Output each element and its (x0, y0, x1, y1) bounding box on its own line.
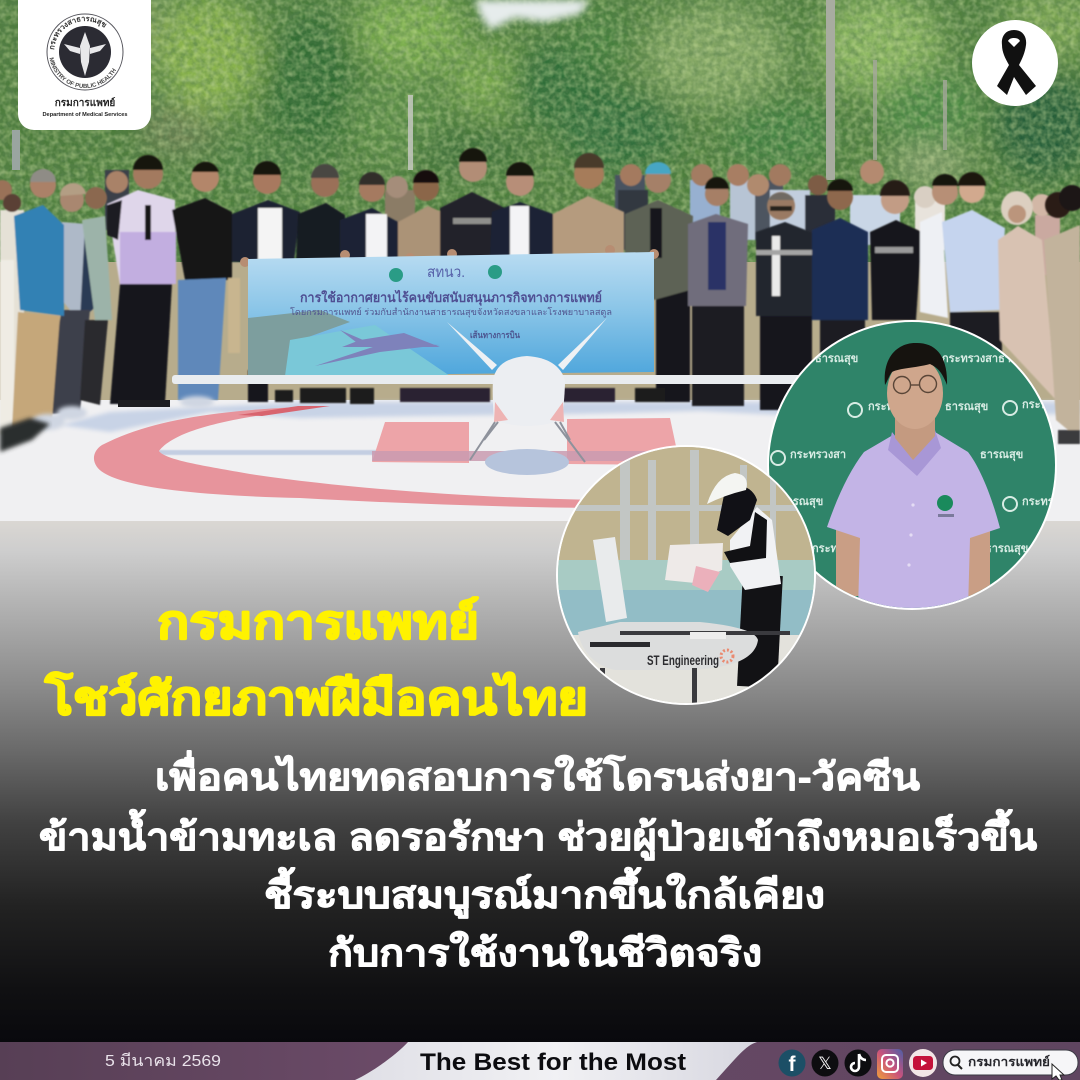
footer: slogan panel: The Best for the Most (420, 1049, 686, 1076)
jacket men (232, 200, 300, 262)
banner: aircraft illustration (315, 330, 440, 366)
tan uniform (396, 206, 442, 256)
icon: YouTube (909, 1049, 937, 1077)
dark vest man (756, 222, 816, 316)
team members standing in a row (0, 148, 1080, 452)
icon: X: 𝕏 (818, 1054, 832, 1073)
dry grass behind team (0, 262, 1080, 412)
helipad ground (0, 400, 1080, 522)
footer bar (0, 1042, 1080, 1080)
olive jacket (625, 200, 693, 300)
staff person in white vest (665, 473, 783, 688)
legs behind banner (656, 290, 690, 402)
search pill: กรมการแพทย์ (968, 1054, 1050, 1069)
banner: text: การใช้อากาศยานไร้คนขับสนับสนุนภารกิจทางการแพทย์ (300, 289, 602, 306)
black shirt reflective (440, 192, 505, 260)
icon: black mourning ribbon badge (972, 20, 1058, 106)
polo + jeans (172, 198, 232, 280)
far left, white uniform (0, 210, 24, 435)
grey jacket (688, 214, 748, 306)
icon: ministry seal: MINISTRY OF PUBLIC HEALTH (50, 57, 116, 88)
search pill (943, 1050, 1078, 1080)
backdrop logos: กระทรวงสา (790, 449, 846, 461)
body text: white summary (39, 750, 1037, 975)
icon: facebook (778, 1050, 806, 1076)
headline: yellow title: กรมการแพทย์ (157, 596, 479, 648)
icon: ministry seal: กระทรวงสาธารณสุข (50, 16, 106, 50)
inset photo: staff loading drone (556, 445, 818, 705)
gradient fade panel to black (0, 521, 1080, 1042)
icon: cursor arrow (1052, 1064, 1064, 1080)
icon: ministry seal (46, 14, 124, 90)
tan pants, blue shirt (14, 205, 64, 316)
lilac vest man (107, 190, 176, 285)
sky and tree line (0, 0, 1080, 262)
icon: TikTok (844, 1050, 872, 1076)
headline: yellow title: โชว์ศักยภาพฝีมือคนไทย (44, 671, 588, 724)
logo card: Department of Medical Services (18, 0, 151, 130)
body text: white summary: กับการใช้งานในชีวิตจริง (328, 931, 762, 975)
backdrop logos: ธารณสุข (815, 353, 858, 366)
icon: X (812, 1050, 838, 1076)
banner: coastline image (248, 310, 350, 376)
banner: text: เส้นทางการบิน (470, 330, 521, 340)
backdrop logos: กระทรวงสาธารณสุข (942, 353, 1041, 366)
backdrop logos (771, 353, 1065, 556)
footer: date: 5 มีนาคม 2569 (105, 1052, 221, 1070)
banner: text (290, 264, 612, 340)
backdrop logos: กระทรวง (868, 401, 911, 413)
drone body with brand (578, 537, 790, 704)
navy suit (490, 202, 553, 258)
banner held by team (248, 252, 654, 376)
logo text (42, 97, 128, 118)
tan uniform 2 (553, 196, 624, 256)
headline: yellow title (44, 596, 588, 724)
helipad H markers (372, 422, 469, 463)
hijab + beige uniforms (998, 226, 1056, 400)
backdrop logos: กระทรวง (812, 543, 855, 555)
drone on helipad (172, 318, 802, 462)
helipad ring (94, 407, 600, 508)
vest man 3 (82, 216, 112, 320)
banner: text: สทนว. (427, 264, 465, 281)
navy vest (812, 218, 868, 320)
backdrop logos: กระทรวง (1022, 399, 1065, 411)
body text: white summary: ชี้ระบบสมบูรณ์มากขึ้นใกล้เคียง (264, 867, 825, 919)
icon: Instagram (877, 1049, 903, 1079)
footer: slogan panel (355, 1042, 757, 1080)
doctor figure (836, 530, 860, 596)
body text: white summary: เพื่อคนไทยทดสอบการใช้โดรนส่งยา-วัคซีน (155, 750, 920, 799)
logo text: Department of Medical Services (42, 112, 128, 118)
backdrop logos: ธารณสุข (985, 543, 1028, 556)
background photo: team group with drone on helipad (0, 0, 1080, 522)
hands on banner (240, 245, 659, 267)
white coat + blue (920, 212, 948, 318)
cap woman, dark jacket (61, 221, 86, 311)
banner: text: โดยกรมการแพทย์ ร่วมกับสำนักงานสาธารณสุขจังหวัดสงขลาและโรงพยาบาลสตูล (290, 306, 612, 318)
body text: white summary: ข้ามน้ำข้ามทะเล ลดรอรักษา ช่วยผู้ป่วยเข้าถึงหมอเร็วขึ้น (39, 809, 1037, 861)
backdrop logos: ธารณสุข (780, 496, 823, 509)
shoes (31, 396, 214, 430)
logo text: กรมการแพทย์ (55, 97, 115, 109)
backdrop logos: ธารณสุข (980, 449, 1023, 462)
backdrop logos: ธารณสุข (945, 401, 988, 414)
icon: facebook: f (788, 1053, 796, 1076)
back row (105, 170, 129, 230)
inset photo: doctor in lilac shirt (760, 320, 1065, 610)
backdrop logos: กระทรวง (1022, 496, 1065, 508)
black polo woman (870, 220, 922, 320)
drone body with brand: ST Engineering (647, 653, 719, 668)
